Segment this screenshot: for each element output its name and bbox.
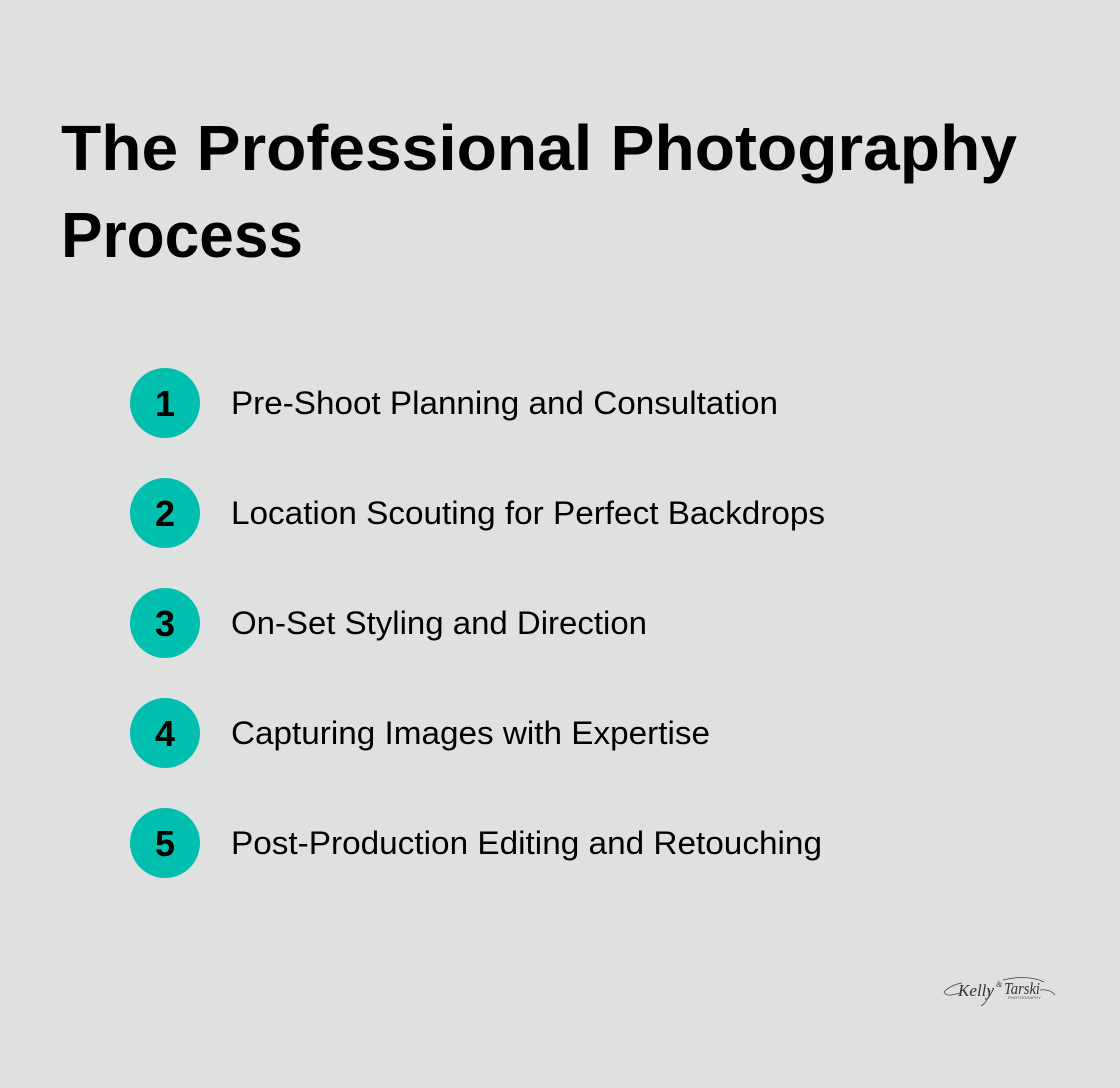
step 2: 2 <box>155 493 175 534</box>
step 2 <box>130 478 825 548</box>
logo: signature: Kelly <box>957 981 994 1000</box>
step 3: 3 <box>155 603 175 644</box>
step 5 <box>130 808 822 878</box>
title: Process <box>61 199 303 271</box>
step 5: Post-Production Editing and Retouching <box>231 825 822 861</box>
logo: signature: & <box>996 980 1003 989</box>
step 4: Capturing Images with Expertise <box>231 715 710 751</box>
title <box>61 112 1017 271</box>
step 3 <box>130 588 647 658</box>
step 3: On-Set Styling and Direction <box>231 605 647 641</box>
title: The Professional Photography <box>61 112 1017 184</box>
step 4: 4 <box>155 713 175 754</box>
step 1: 1 <box>155 383 175 424</box>
logo: signature: Tarski <box>1004 979 1040 998</box>
step 1 <box>130 368 778 438</box>
logo: signature: PHOTOGRAPHY <box>1008 996 1042 1000</box>
logo: signature <box>944 978 1055 1006</box>
step 5: 5 <box>155 823 175 864</box>
step 1: Pre-Shoot Planning and Consultation <box>231 385 778 421</box>
step 4 <box>130 698 710 768</box>
step 2: Location Scouting for Perfect Backdrops <box>231 495 825 531</box>
